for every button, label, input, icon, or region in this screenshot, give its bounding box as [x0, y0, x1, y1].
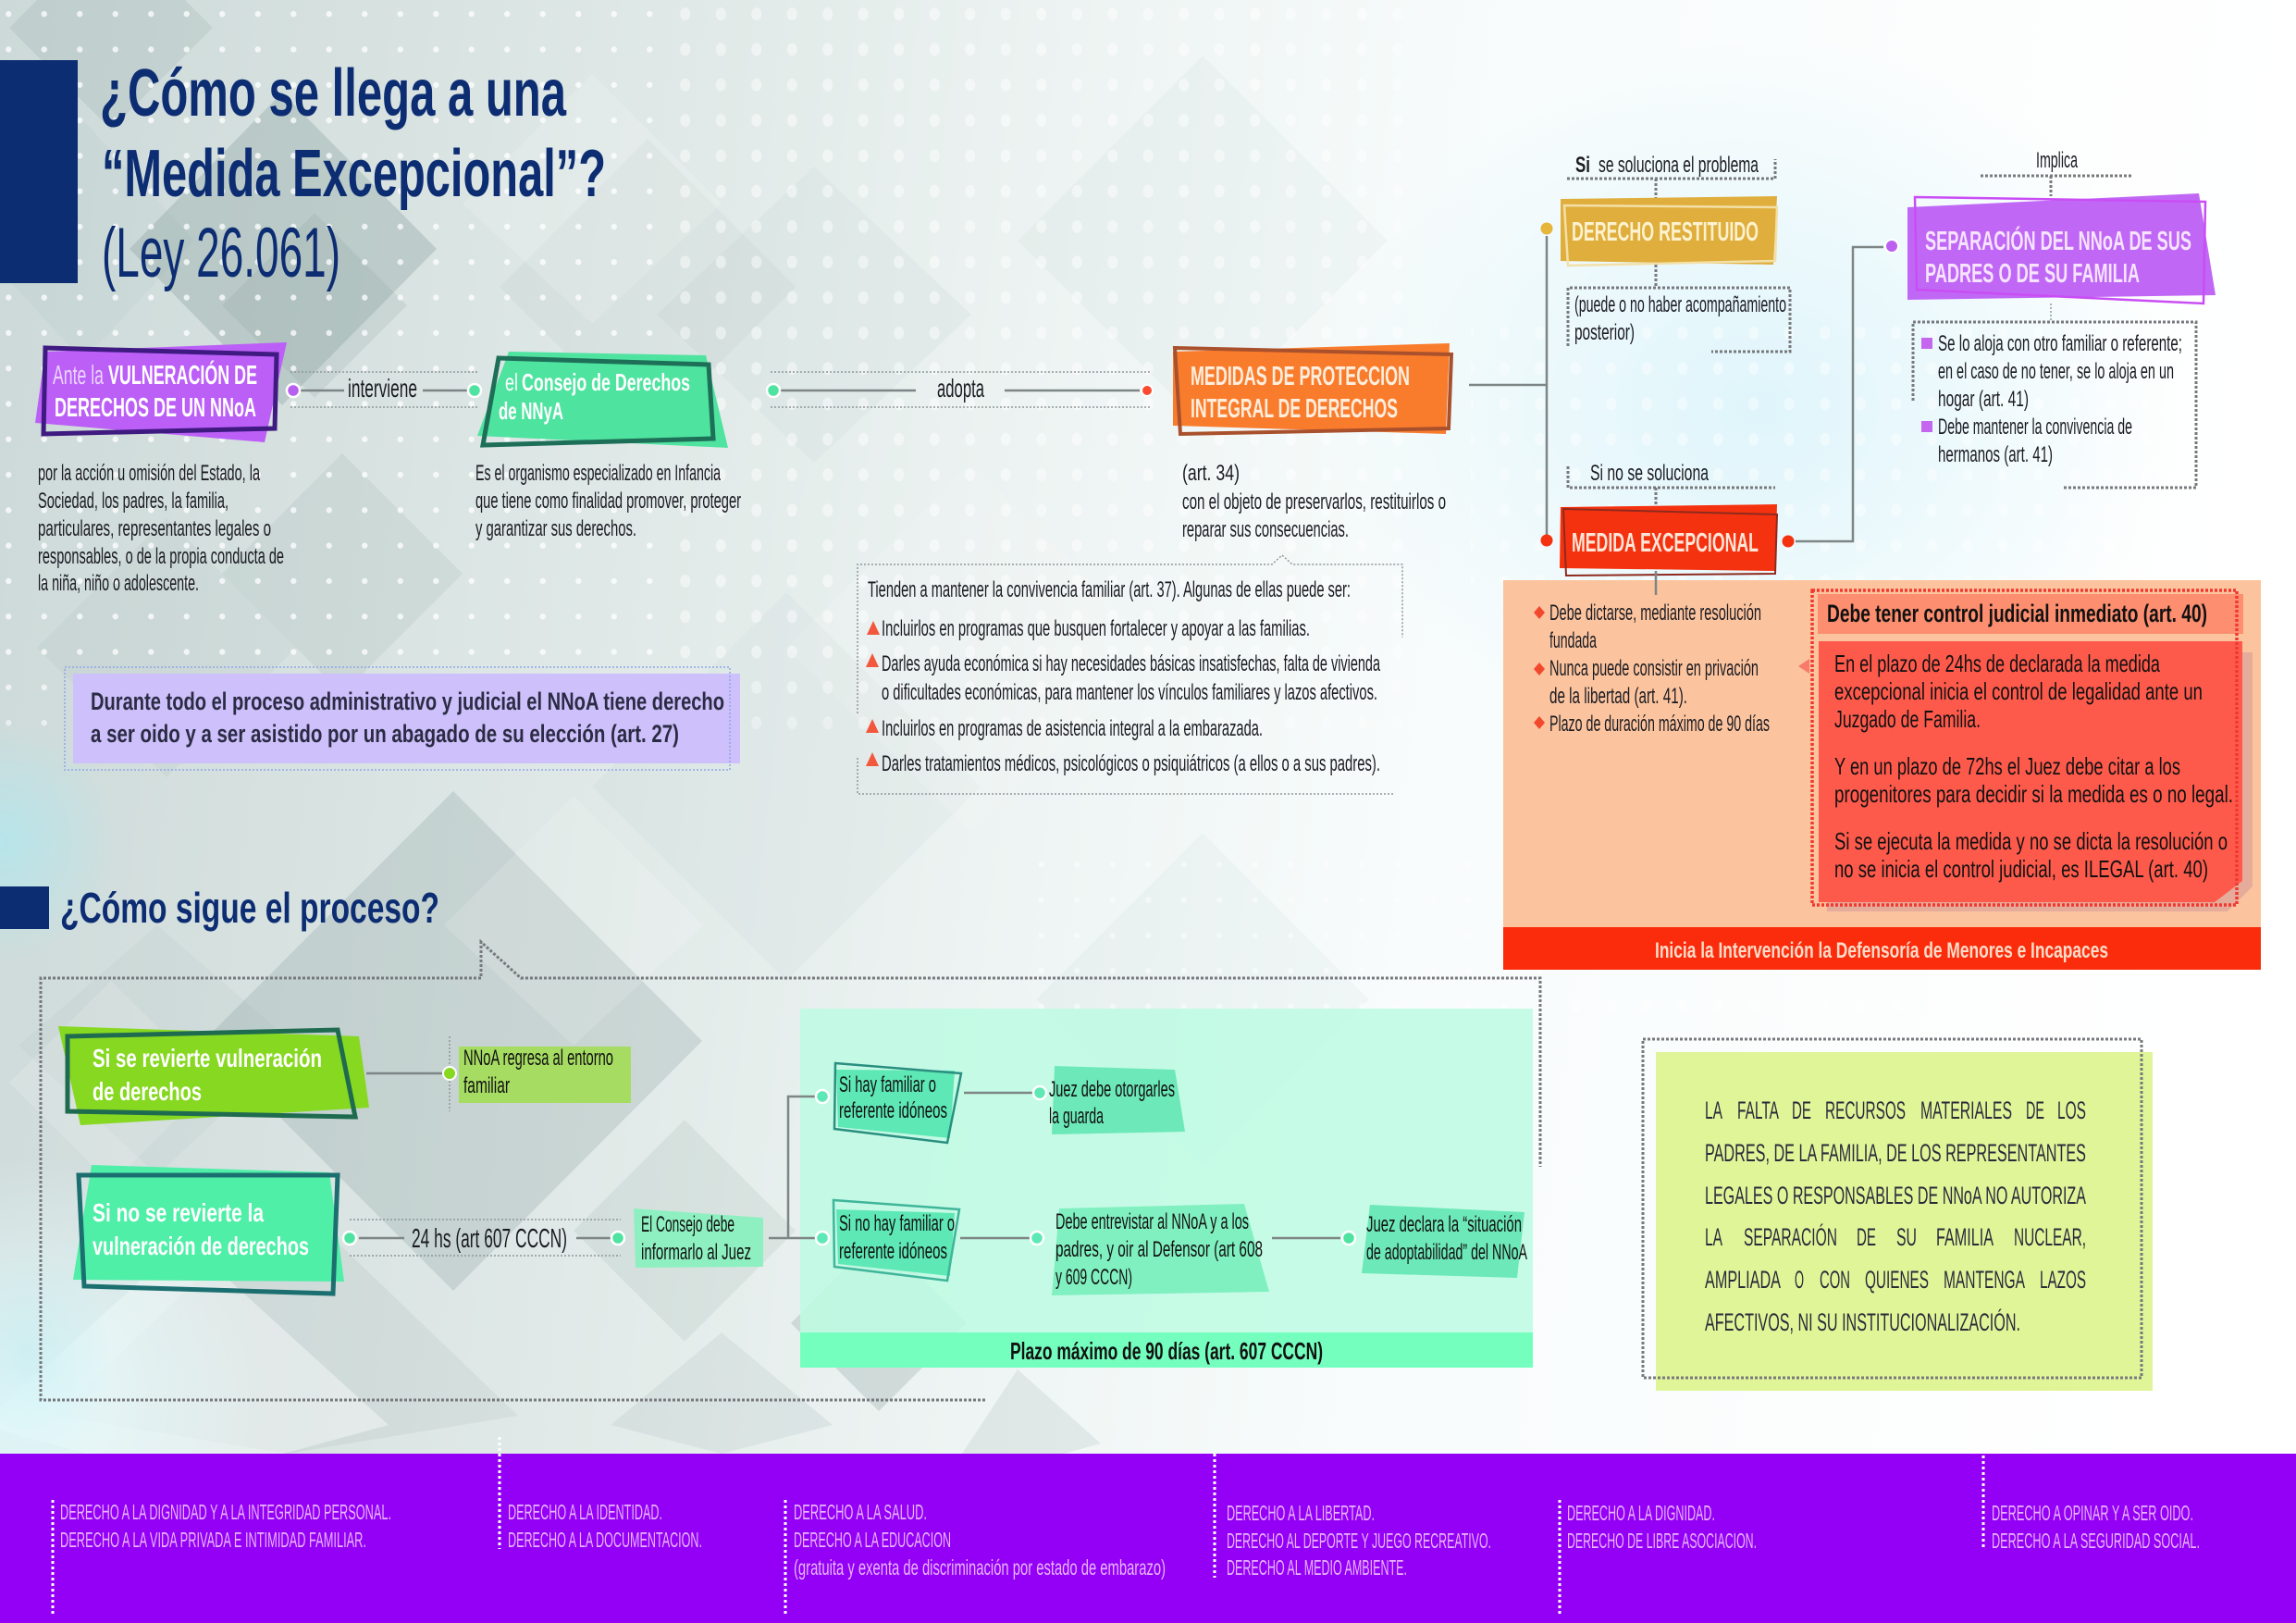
- connector: 24 hs: [343, 1220, 624, 1256]
- footer column 4: DERECHO AL DEPORTE Y JUEGO RECREATIVO.: [1227, 1529, 1491, 1553]
- panel: medida excepcional details: de la libertad (art. 41).: [1549, 684, 1687, 709]
- note: acompañamiento: [1568, 265, 1790, 352]
- panel: convivencia familiar list: o dificultades económicas, para mantener los vínculos familiares y lazos afectivos.: [882, 680, 1377, 705]
- box: Consejo de Derechos: de NNyA: [499, 397, 563, 425]
- box: vulneración de derechos: VULNERACIÓN DE: [108, 359, 257, 390]
- panel: convivencia familiar list: Darles tratamientos médicos, psicológicos o psiquiátricos (a ellos o a sus padres).: [882, 751, 1380, 776]
- callout: falta de recursos: LAZOS: [2040, 1266, 2086, 1294]
- dotted process frame: [41, 942, 1540, 1400]
- text: por la acción: particulares, representantes legales o: [38, 516, 271, 541]
- box: situación de adoptabilidad: de adoptabilidad” del NNoA: [1366, 1240, 1527, 1265]
- callout: falta de recursos: AFECTIVOS, NI SU INSTITUCIONALIZACIÓN.: [1705, 1307, 2020, 1336]
- box: medidas de protección: INTEGRAL DE DERECHOS: [1191, 394, 1398, 424]
- panel: medida excepcional details: Nunca puede consistir en privación: [1549, 656, 1759, 681]
- box: vulneración de derechos: [35, 342, 287, 442]
- box: si no hay familiar: [833, 1200, 959, 1281]
- connector: guarda: [964, 1086, 1046, 1099]
- label: implica: [1981, 148, 2132, 196]
- text: art. 34: [1182, 461, 1446, 542]
- callout: falta de recursos: FALTA: [1737, 1096, 1779, 1124]
- box: si hay familiar: Si hay familiar o: [839, 1072, 936, 1097]
- fork lines: [769, 1090, 829, 1245]
- panel: plazo máximo: [800, 1009, 1533, 1368]
- callout: falta de recursos: LA: [1705, 1223, 1722, 1251]
- box: el Consejo debe informarlo: informarlo al Juez: [641, 1240, 751, 1265]
- footer column 2: [508, 1500, 702, 1552]
- panel: convivencia familiar list: Incluirlos en programas de asistencia integral a la embarazada.: [882, 716, 1263, 741]
- note: alojamiento: hogar (art. 41): [1938, 387, 2029, 412]
- footer column 5: [1567, 1501, 1757, 1553]
- box: Consejo de Derechos: el: [505, 368, 518, 396]
- heading: cómo sigue el proceso: [0, 884, 439, 932]
- box: si no se revierte: vulneración de derechos: [93, 1232, 309, 1260]
- label: si se soluciona: se soluciona el problema: [1599, 153, 1759, 178]
- callout: falta de recursos: SU: [1896, 1223, 1917, 1251]
- heading: cómo sigue el proceso: ¿Cómo sigue el proceso?: [60, 884, 439, 932]
- callout: falta de recursos: RECURSOS: [1825, 1096, 1906, 1124]
- box: NNoA regresa: familiar: [463, 1073, 510, 1098]
- bullets: [866, 621, 880, 766]
- callout: falta de recursos: MANTENGA: [1944, 1266, 2025, 1294]
- callout: falta de recursos: O: [1795, 1266, 1804, 1294]
- footer column 1: [60, 1500, 391, 1552]
- footer column 4: DERECHO AL MEDIO AMBIENTE.: [1227, 1555, 1407, 1580]
- panel: convivencia familiar list: Tienden a mantener la convivencia familiar (art. 37). Algunas de ellas puede ser:: [868, 577, 1351, 602]
- callout: falta de recursos: [1643, 1039, 2153, 1391]
- box: el Consejo debe informarlo: El Consejo debe: [641, 1212, 734, 1237]
- label: si no se soluciona: [1568, 461, 1775, 507]
- callout: falta de recursos: MATERIALES: [1920, 1096, 2012, 1124]
- callout: falta de recursos: FAMILIA: [1936, 1223, 1994, 1251]
- connector: adoptabilidad: [1272, 1232, 1355, 1245]
- callout: derecho a ser oído: Durante todo el proceso administrativo y judicial el NNoA tiene derecho: [91, 688, 724, 715]
- callout: falta de recursos: SEPARACIÓN: [1744, 1222, 1837, 1251]
- connector: interviene: [287, 372, 481, 407]
- connector: entrevistar: [960, 1232, 1043, 1245]
- footer column 4: DERECHO A LA LIBERTAD.: [1227, 1501, 1375, 1525]
- panel: convivencia familiar list: Incluirlos en programas que busquen fortalecer y apoyar a las familias.: [882, 616, 1310, 641]
- box: juez otorgar guarda: Juez debe otorgarles: [1049, 1077, 1175, 1102]
- footer column 5: DERECHO DE LIBRE ASOCIACION.: [1567, 1529, 1757, 1553]
- box: si no se revierte: Si no se revierte la: [93, 1198, 264, 1227]
- footer column 1: DERECHO A LA VIDA PRIVADA E INTIMIDAD FAMILIAR.: [60, 1528, 366, 1552]
- control judicial box: [1798, 590, 2253, 911]
- callout: derecho a ser oído: [65, 667, 740, 770]
- box: Consejo de Derechos: [477, 352, 728, 448]
- control judicial box: Juzgado de Familia.: [1834, 705, 1981, 733]
- footer column 3: (gratuita y exenta de discriminación por estado de embarazo): [794, 1555, 1166, 1580]
- bullets: [1534, 606, 1545, 729]
- box: vulneración de derechos: Ante la: [53, 361, 105, 390]
- connector: adopta: adopta: [937, 374, 984, 403]
- callout: derecho a ser oído: a ser oido y a ser asistido por un abagado de su elección (art. 27): [91, 720, 679, 748]
- box: NNoA regresa: [459, 1046, 631, 1103]
- text: organismo especializado: [475, 461, 741, 541]
- text: organismo especializado: Es el organismo especializado en Infancia: [475, 461, 721, 486]
- text: por la acción: la niña, niño o adolescente.: [38, 571, 199, 596]
- footer column 3: DERECHO A LA EDUCACION: [794, 1528, 951, 1552]
- box: vulneración de derechos: DERECHOS DE UN NNoA: [55, 393, 256, 423]
- title line 2: “Medida Excepcional”?: [102, 137, 606, 211]
- note: alojamiento: [1913, 304, 2196, 488]
- title accent bar: [0, 60, 78, 283]
- footer band: derechos: [0, 1437, 2296, 1623]
- box: si hay familiar: [834, 1063, 961, 1143]
- box: si se revierte: Si se revierte vulneración: [93, 1044, 322, 1072]
- box: el Consejo debe informarlo: [634, 1208, 763, 1268]
- connector: to separación: [1782, 240, 1898, 548]
- text: por la acción: por la acción u omisión del Estado, la: [38, 461, 260, 486]
- callout: falta de recursos: LOS: [2057, 1096, 2086, 1124]
- text: organismo especializado: que tiene como finalidad promover, proteger: [475, 489, 741, 514]
- box: si no hay familiar: Si no hay familiar o: [839, 1211, 955, 1236]
- box: separación: [1907, 193, 2216, 304]
- footer column 3: DERECHO A LA SALUD.: [794, 1500, 927, 1524]
- box: debe entrevistar: y 609 CCCN): [1055, 1265, 1132, 1290]
- text: por la acción: [38, 461, 284, 596]
- text: organismo especializado: y garantizar sus derechos.: [475, 516, 636, 541]
- text: por la acción: responsables, o de la propia conducta de: [38, 544, 284, 569]
- footer column 1: DERECHO A LA DIGNIDAD Y A LA INTEGRIDAD PERSONAL.: [60, 1500, 391, 1524]
- box: si se revierte: de derechos: [93, 1077, 202, 1106]
- footer column 2: DERECHO A LA IDENTIDAD.: [508, 1500, 662, 1524]
- callout: falta de recursos: DE: [1792, 1096, 1811, 1124]
- footer column 4: [1227, 1501, 1491, 1580]
- box: juez otorgar guarda: [1049, 1066, 1185, 1134]
- control judicial box: En el plazo de 24hs de declarada la medida: [1834, 650, 2160, 677]
- label: implica: Implica: [2036, 148, 2078, 173]
- footer column 2: DERECHO A LA DOCUMENTACION.: [508, 1528, 702, 1552]
- footer column 3: [794, 1500, 1166, 1580]
- label: si se soluciona: Si: [1575, 153, 1590, 178]
- text: art. 34: con el objeto de preservarlos, restituirlos o: [1182, 489, 1446, 514]
- panel: convivencia familiar list: Darles ayuda económica si hay necesidades básicas insatisfechas, falta de vivienda: [882, 651, 1380, 676]
- title line 1: ¿Cómo se llega a una: [100, 56, 567, 130]
- box: medidas de protección: [1173, 343, 1451, 434]
- title block: [0, 56, 606, 292]
- box: situación de adoptabilidad: Juez declara la “situación: [1366, 1212, 1522, 1237]
- banner: defensoría: Inicia la Intervención la Defensoría de Menores e Incapaces: [1655, 938, 2108, 963]
- box: juez otorgar guarda: la guarda: [1049, 1104, 1104, 1129]
- box: derecho restituido: DERECHO RESTITUIDO: [1572, 217, 1759, 247]
- callout: falta de recursos: NUCLEAR,: [2014, 1223, 2086, 1251]
- box: medida excepcional: MEDIDA EXCEPCIONAL: [1572, 528, 1759, 558]
- note: alojamiento: hermanos (art. 41): [1938, 442, 2053, 467]
- box: NNoA regresa: NNoA regresa al entorno: [463, 1046, 613, 1071]
- connector: 24 hs: 24 hs (art 607 CCCN): [412, 1224, 567, 1254]
- callout: falta de recursos: LA: [1705, 1096, 1722, 1124]
- label: si se soluciona: [1567, 153, 1775, 200]
- text: por la acción: Sociedad, los padres, la familia,: [38, 489, 228, 514]
- panel: plazo máximo: Plazo máximo de 90 días (art. 607 CCCN): [1010, 1337, 1323, 1365]
- callout: falta de recursos: QUIENES: [1865, 1266, 1929, 1294]
- connector: adopta: [767, 372, 1153, 407]
- box: separación: PADRES O DE SU FAMILIA: [1925, 259, 2140, 289]
- box: medida excepcional: [1560, 504, 1777, 576]
- callout: falta de recursos: DE: [2026, 1096, 2044, 1124]
- callout: falta de recursos: DE: [1857, 1223, 1876, 1251]
- box: Consejo de Derechos: Consejo de Derechos: [522, 368, 690, 396]
- panel: medida excepcional details: Plazo de duración máximo de 90 días: [1549, 712, 1770, 737]
- connector: interviene: interviene: [348, 374, 417, 403]
- footer column 6: [1992, 1501, 2200, 1553]
- box: si no se revierte: [73, 1165, 344, 1294]
- title line 3: (Ley 26.061): [102, 214, 340, 292]
- box: derecho restituido: [1561, 196, 1777, 266]
- text: art. 34: (art. 34): [1182, 461, 1240, 486]
- note: acompañamiento: posterior): [1574, 320, 1635, 345]
- note: acompañamiento: (puede o no haber acompañamiento: [1574, 292, 1786, 317]
- footer column 5: DERECHO A LA DIGNIDAD.: [1567, 1501, 1715, 1525]
- callout: falta de recursos: CON: [1820, 1266, 1850, 1294]
- box: si hay familiar: referente idóneos: [839, 1098, 947, 1123]
- branch lines: [1469, 222, 1552, 546]
- label: si no se soluciona: Si no se soluciona: [1590, 461, 1709, 486]
- callout: falta de recursos: AMPLIADA: [1705, 1266, 1781, 1294]
- connector: regresa: [366, 1036, 456, 1111]
- text: art. 34: reparar sus consecuencias.: [1182, 517, 1349, 542]
- box: situación de adoptabilidad: [1362, 1205, 1527, 1278]
- note: alojamiento: Debe mantener la convivencia de: [1938, 415, 2132, 440]
- box: debe entrevistar: [1052, 1204, 1269, 1295]
- box: medidas de protección: MEDIDAS DE PROTECCION: [1191, 362, 1410, 391]
- box: debe entrevistar: padres, y oir al Defensor (art 608: [1055, 1237, 1263, 1262]
- panel: medida excepcional details: fundada: [1549, 628, 1597, 653]
- box: si no hay familiar: referente idóneos: [839, 1239, 947, 1264]
- panel: convivencia familiar list: [858, 555, 1402, 794]
- box: debe entrevistar: Debe entrevistar al NNoA y a los: [1055, 1209, 1249, 1234]
- banner: defensoría: [1503, 927, 2261, 970]
- box: si se revierte: [58, 1026, 369, 1125]
- panel: medida excepcional details: Debe dictarse, mediante resolución: [1549, 601, 1761, 626]
- panel: medida excepcional details: [1503, 571, 2261, 970]
